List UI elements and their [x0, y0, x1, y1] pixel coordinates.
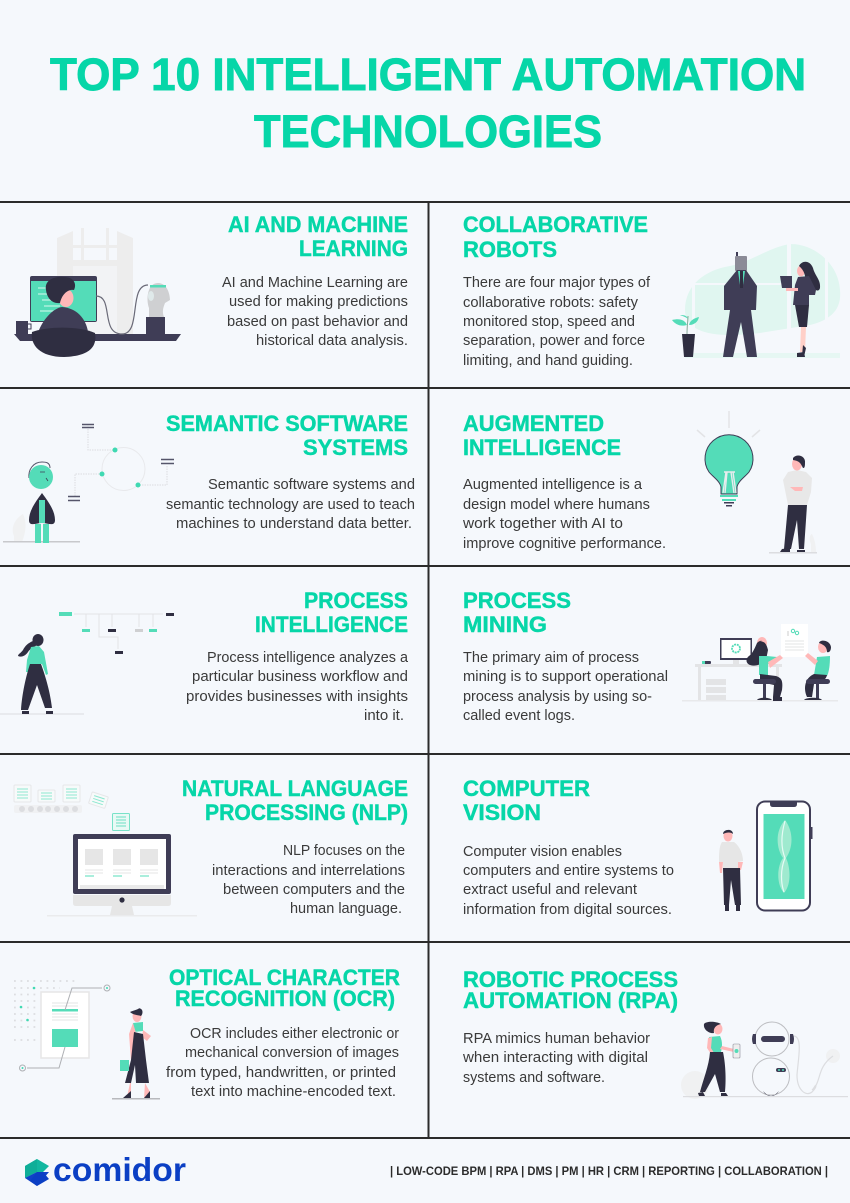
text: augmented intelligence: Augmented intelligence is a [463, 477, 643, 493]
text: computer vision: computers and entire systems to [463, 863, 674, 879]
icon: documents on conveyor and desktop monitor [14, 785, 197, 916]
heading: semantic software systems: SYSTEMS [303, 435, 408, 460]
heading: process intelligence: PROCESS [304, 588, 408, 613]
panel: robotic process automation [462, 967, 848, 1099]
text: robotic process automation: when interacting with digital [462, 1050, 648, 1066]
text: process mining: mining is to support operational [463, 669, 668, 685]
panel: optical character recognition [14, 965, 400, 1100]
panel: computer vision [463, 776, 812, 918]
text: augmented intelligence: improve cognitive performance. [463, 536, 666, 552]
text: process intelligence: into it. [364, 708, 404, 724]
heading: collaborative robots [463, 212, 648, 262]
icon: person with circular semantic network [3, 424, 174, 543]
heading: AI and machine learning: AI AND MACHINE [228, 212, 408, 237]
heading: process intelligence: INTELLIGENCE [255, 612, 408, 637]
text: natural language processing: human language. [290, 901, 402, 917]
text: optical character recognition: from typed, handwritten, or printed [166, 1065, 396, 1081]
text: computer vision: Computer vision enables [463, 844, 622, 860]
icon: scanned document and woman [14, 981, 160, 1100]
text: robotic process automation: RPA mimics human behavior [463, 1031, 650, 1047]
text: AI and machine learning [222, 275, 408, 349]
heading: augmented intelligence: INTELLIGENCE [463, 435, 621, 460]
text: semantic software systems: semantic technology are used to teach [166, 497, 415, 513]
text: optical character recognition: OCR includes either electronic or [190, 1026, 399, 1042]
text: optical character recognition: mechanical conversion of images [185, 1045, 399, 1061]
heading: semantic software systems: SEMANTIC SOFTWARE [166, 411, 408, 436]
icon: two people reviewing a document at desk [682, 624, 838, 702]
panel: AI and machine learning [14, 212, 408, 357]
heading: collaborative robots: ROBOTS [463, 237, 557, 262]
heading: computer vision: COMPUTER [463, 776, 590, 801]
text: optical character recognition: text into machine-encoded text. [191, 1084, 396, 1100]
text: natural language processing: NLP focuses on the [283, 843, 405, 859]
text: process intelligence: Process intelligence analyzes a [207, 650, 409, 666]
heading: collaborative robots: COLLABORATIVE [463, 212, 648, 237]
heading: natural language processing [182, 776, 408, 825]
icon: light bulb and man [697, 411, 817, 554]
text: natural language processing: between computers and the [223, 882, 405, 898]
heading: computer vision [463, 776, 590, 825]
heading: robotic process automation [463, 967, 678, 1013]
text: process mining: called event logs. [463, 708, 575, 724]
heading: robotic process automation: AUTOMATION (RPA) [463, 988, 678, 1013]
heading: computer vision: VISION [463, 800, 541, 825]
text: collaborative robots: There are four major types of [463, 275, 651, 291]
text: robotic process automation: systems and software. [463, 1070, 605, 1086]
heading: optical character recognition: RECOGNITION (OCR) [175, 986, 395, 1011]
heading: augmented intelligence: AUGMENTED [463, 411, 604, 436]
footer: comidor logo: comidor [53, 1151, 186, 1188]
heading: AI and machine learning [228, 212, 408, 261]
heading: optical character recognition: OPTICAL CHARACTER [169, 965, 400, 990]
text: semantic software systems: Semantic software systems and [208, 477, 415, 493]
heading: natural language processing: NATURAL LANGUAGE [182, 776, 408, 801]
text: process intelligence: particular business workflow and [192, 669, 408, 685]
text: augmented intelligence [462, 477, 666, 552]
heading: augmented intelligence [463, 411, 621, 460]
heading: process intelligence [255, 588, 408, 637]
title: TECHNOLOGIES [254, 106, 602, 157]
icon: process flow diagram and woman [0, 612, 174, 714]
heading: process mining: MINING [463, 612, 547, 637]
text: optical character recognition [166, 1026, 399, 1100]
heading: AI and machine learning: LEARNING [299, 236, 408, 261]
text: process intelligence: provides businesses with insights [186, 689, 408, 705]
panel: augmented intelligence [462, 411, 817, 554]
text: collaborative robots: limiting, and hand guiding. [463, 353, 633, 369]
panel: process mining [463, 588, 838, 724]
text: collaborative robots [463, 275, 651, 369]
title: TOP 10 INTELLIGENT AUTOMATION [50, 49, 806, 100]
text: natural language processing [212, 843, 405, 917]
text: augmented intelligence: work together with AI to [462, 516, 623, 532]
text: process mining: process analysis by using so- [463, 689, 652, 705]
text: computer vision: information from digital sources. [463, 902, 672, 918]
text: augmented intelligence: design model where humans [463, 497, 650, 513]
text: robotic process automation [462, 1031, 650, 1086]
heading: optical character recognition [169, 965, 400, 1011]
title [50, 49, 806, 157]
icon: man beside smartphone [719, 802, 812, 911]
text: semantic software systems [166, 477, 415, 532]
text: AI and machine learning: AI and Machine Learning are [222, 275, 408, 291]
icon: person at computer connected to a head [14, 228, 181, 357]
text: process mining: The primary aim of process [463, 650, 639, 666]
text: semantic software systems: machines to understand data better. [176, 516, 412, 532]
text: AI and machine learning: used for making predictions [229, 294, 408, 310]
panel: natural language processing [14, 776, 408, 917]
text: AI and machine learning: historical data analysis. [256, 333, 408, 349]
text: natural language processing: interactions and interrelations [212, 863, 405, 879]
heading: robotic process automation: ROBOTIC PROCESS [463, 967, 678, 992]
heading: semantic software systems [166, 411, 408, 460]
text: AI and machine learning: based on past behavior and [227, 314, 408, 330]
heading: natural language processing: PROCESSING (NLP) [205, 800, 408, 825]
icon: robot-headed man and woman with tablet [672, 243, 840, 358]
text: collaborative robots: collaborative robots: safety [463, 295, 639, 311]
heading: process mining: PROCESS [463, 588, 571, 613]
panel: process intelligence [0, 588, 409, 724]
heading: process mining [463, 588, 571, 637]
text: computer vision: extract useful and relevant [463, 882, 637, 898]
panel: collaborative robots [463, 212, 840, 369]
text: computer vision [463, 844, 674, 918]
text: process mining [463, 650, 668, 724]
panel: semantic software systems [3, 411, 415, 543]
footer: product list: | LOW-CODE BPM | RPA | DMS | PM | HR | CRM | REPORTING | COLLABORATION | [390, 1166, 828, 1178]
text: process intelligence [186, 650, 409, 724]
text: collaborative robots: separation, power and force [463, 333, 645, 349]
icon: woman with phone and robot [681, 1022, 848, 1099]
text: collaborative robots: monitored stop, speed and [463, 314, 635, 330]
